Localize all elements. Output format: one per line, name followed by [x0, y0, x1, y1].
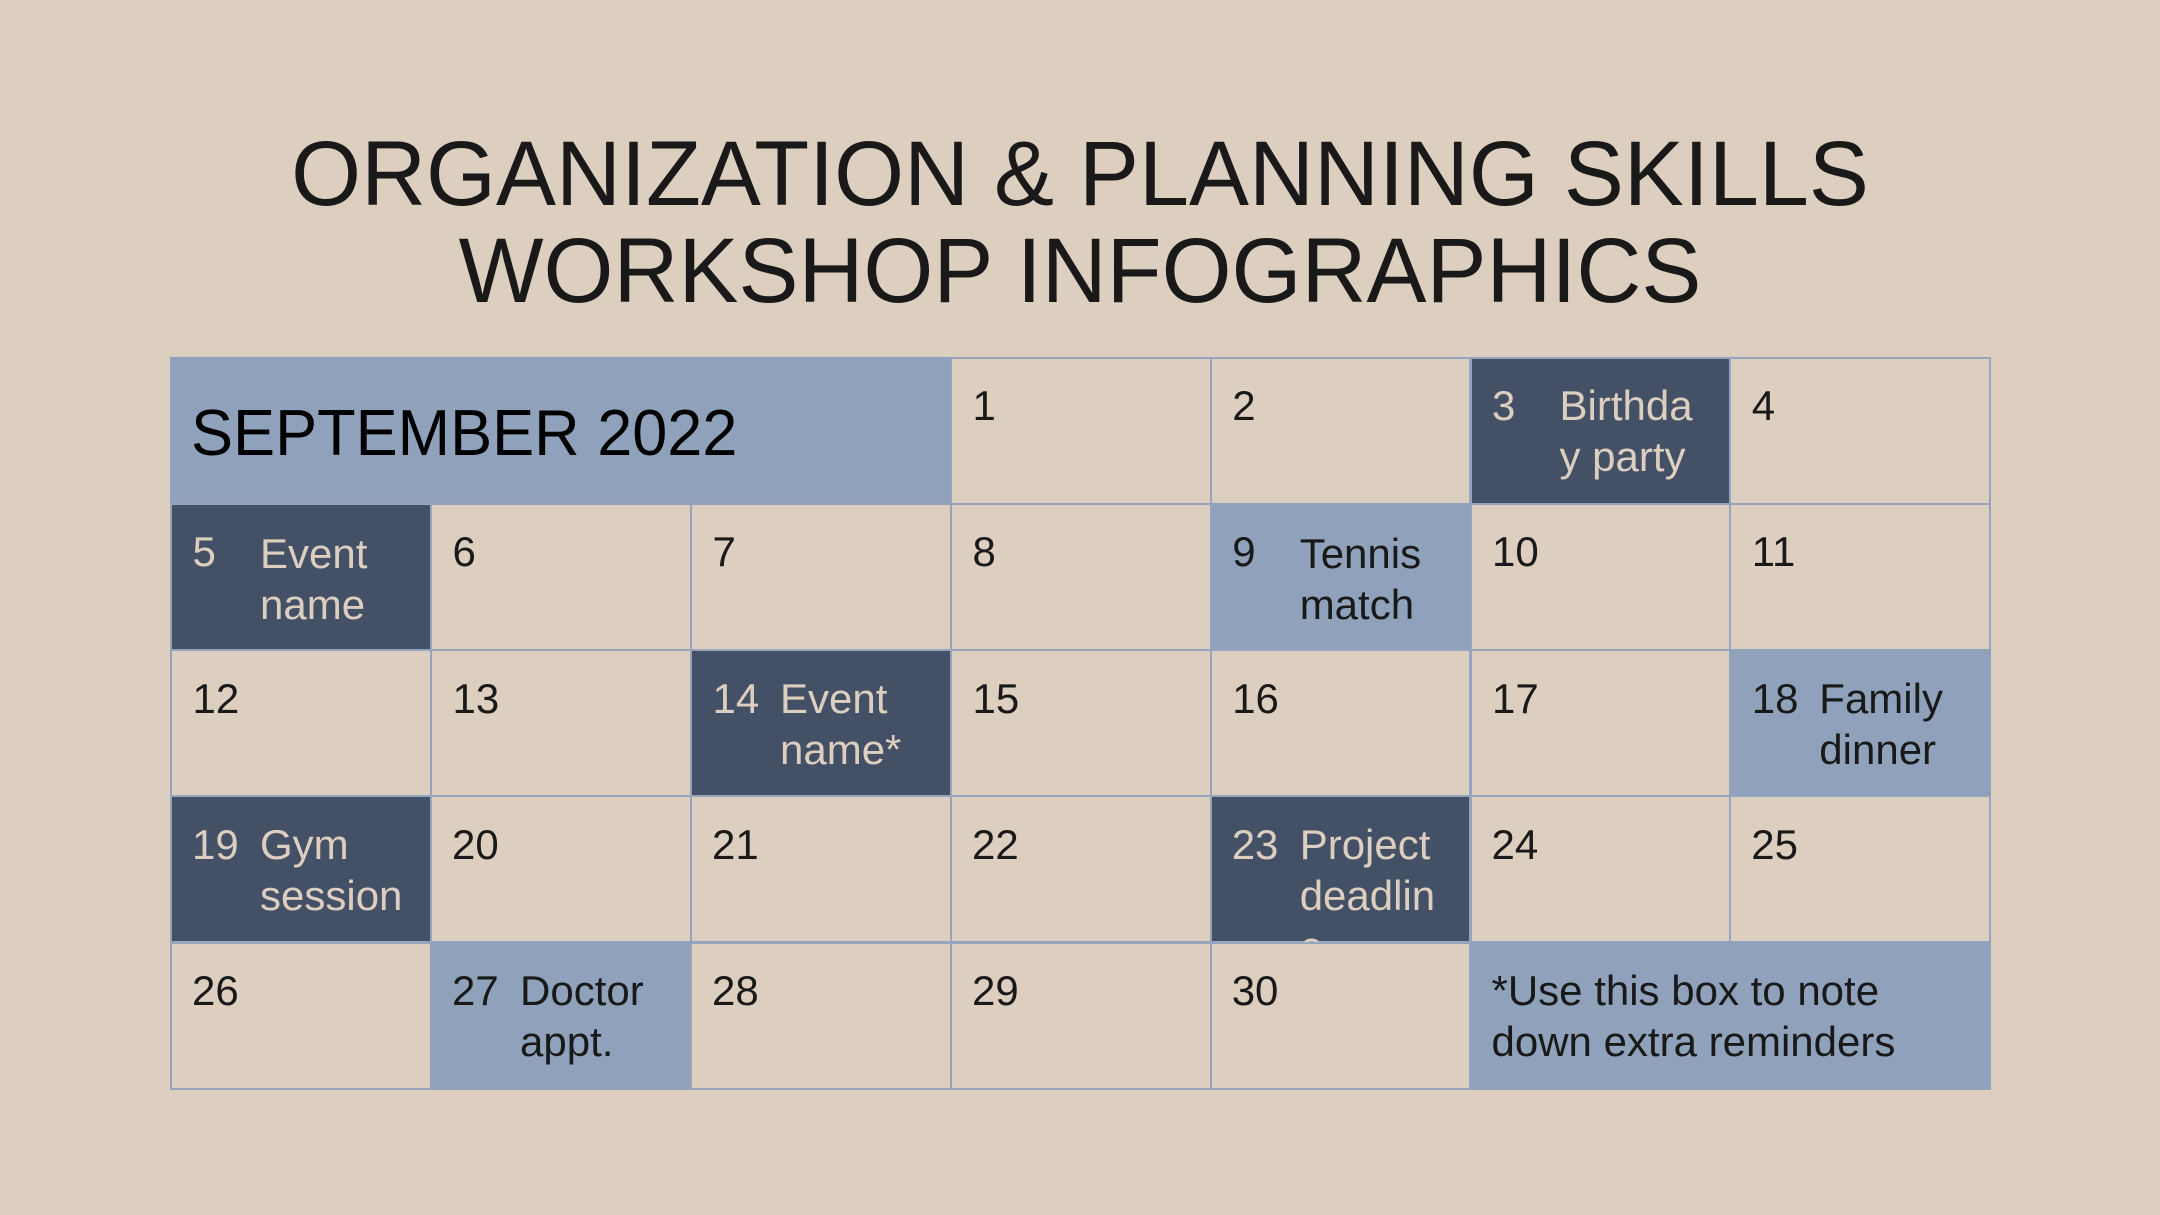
cell: reminder note box [1470, 942, 1991, 1090]
cell: day 7 [690, 503, 952, 651]
cell: day 9 tennis match: 9 [1232, 528, 1256, 575]
cell: day 23 project deadline: 23 [1232, 821, 1278, 868]
cell: day 3 birthday party: y party [1560, 433, 1686, 480]
cell: day 24 [1470, 795, 1731, 943]
cell: day 2: 2 [1232, 382, 1256, 429]
cell: day 30: 30 [1232, 967, 1278, 1014]
cell: day 5 event: name [260, 581, 365, 628]
cell: day 28 [690, 942, 952, 1090]
cell: day 27 doctor appointment [430, 942, 692, 1090]
cell: day 18 family dinner [1729, 649, 1991, 797]
cell: day 23 project deadline: Project [1300, 821, 1430, 868]
cell: day 17 [1470, 649, 1731, 797]
cell: day 16: 16 [1232, 675, 1279, 722]
cell: day 27 doctor appointment: Doctor [520, 967, 644, 1014]
cell: day 23 project deadline [1210, 795, 1471, 943]
cell: day 27 doctor appointment: 27 [452, 967, 499, 1014]
cell: day 24: 24 [1492, 821, 1538, 868]
cell: day 10: 10 [1492, 528, 1539, 575]
title [291, 123, 1869, 322]
title: WORKSHOP INFOGRAPHICS [459, 220, 1701, 322]
cell: day 10 [1470, 503, 1731, 651]
cell: day 30 [1210, 942, 1471, 1090]
cell: day 3 birthday party: Birthda [1560, 382, 1693, 429]
cell: day 21 [690, 795, 952, 943]
cell: day 9 tennis match [1210, 503, 1471, 651]
cell: day 17: 17 [1492, 675, 1539, 722]
cell: day 19 gym session [170, 795, 432, 943]
cell: day 14 event: Event [780, 675, 887, 722]
cell: day 12 [170, 649, 432, 797]
cell: day 15: 15 [972, 675, 1019, 722]
cell: day 26: 26 [192, 967, 239, 1014]
cell: day 8: 8 [972, 528, 996, 575]
calendar table: e [1300, 923, 1323, 970]
cell: day 1 [950, 357, 1212, 505]
cell: day 29 [950, 942, 1212, 1090]
cell: day 27 doctor appointment: appt. [520, 1018, 613, 1065]
cell: reminder note box: *Use this box to note [1492, 967, 1879, 1014]
cell: day 25: 25 [1751, 821, 1798, 868]
month heading: SEPTEMBER 2022 [191, 397, 737, 469]
cell: day 22 [950, 795, 1212, 943]
cell: day 5 event [170, 503, 432, 651]
cell: day 7: 7 [712, 528, 736, 575]
cell: day 23 project deadline: deadlin [1300, 872, 1435, 919]
cell: day 21: 21 [712, 821, 759, 868]
cell: day 13 [430, 649, 692, 797]
cell: day 25 [1729, 795, 1991, 943]
cell: day 8 [950, 503, 1212, 651]
cell: month header [170, 357, 952, 505]
cell: day 22: 22 [972, 821, 1019, 868]
cell: day 13: 13 [452, 675, 499, 722]
cell: day 20: 20 [452, 821, 499, 868]
cell: day 5 event: 5 [192, 528, 216, 575]
cell: day 29: 29 [972, 967, 1019, 1014]
cell: day 9 tennis match: match [1300, 581, 1414, 628]
cell: day 19 gym session: Gym [260, 821, 349, 868]
cell: day 4: 4 [1752, 382, 1775, 429]
cell: day 19 gym session: 19 [192, 821, 239, 868]
cell: day 6: 6 [452, 528, 476, 575]
cell: day 6 [430, 503, 692, 651]
cell: day 1: 1 [972, 382, 996, 429]
cell: day 19 gym session: session [260, 872, 402, 919]
cell: day 18 family dinner: dinner [1819, 726, 1936, 773]
cell: day 14 event: 14 [712, 675, 759, 722]
cell: day 14 event [690, 649, 952, 797]
cell: day 9 tennis match: Tennis [1300, 530, 1421, 577]
cell: day 16 [1210, 649, 1471, 797]
cell: day 11 [1729, 503, 1991, 651]
cell: day 5 event: Event [260, 530, 367, 577]
title: ORGANIZATION & PLANNING SKILLS [291, 123, 1869, 225]
cell: day 18 family dinner: 18 [1752, 675, 1799, 722]
cell: day 26 [170, 942, 432, 1090]
cell: reminder note box: down extra reminders [1492, 1018, 1895, 1065]
cell: day 2 [1210, 357, 1471, 505]
cell: day 3 birthday party: 3 [1492, 382, 1515, 429]
cell: day 11: 11 [1752, 528, 1795, 575]
cell: day 28: 28 [712, 967, 759, 1014]
cell: day 20 [430, 795, 692, 943]
cell: day 3 birthday party [1470, 357, 1731, 505]
cell: day 15 [950, 649, 1212, 797]
cell: day 14 event: name* [780, 726, 901, 773]
cell: day 4 [1729, 357, 1991, 505]
cell: day 12: 12 [192, 675, 239, 722]
cell: day 18 family dinner: Family [1819, 675, 1943, 722]
